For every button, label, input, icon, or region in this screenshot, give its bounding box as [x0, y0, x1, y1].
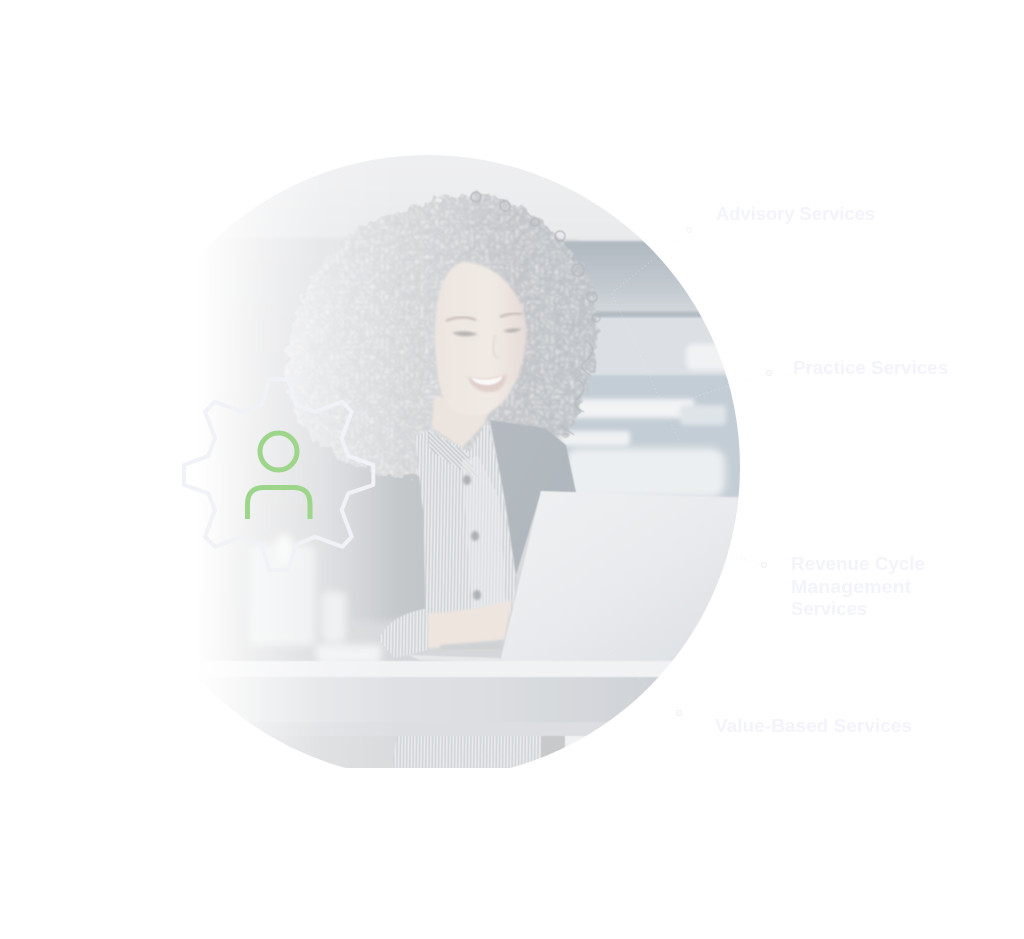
person head [260, 433, 297, 470]
face [435, 262, 526, 416]
connector: advisory [612, 228, 692, 443]
icon: gear with person [184, 379, 373, 570]
label: Revenue Cycle Management Services [791, 554, 925, 619]
gear outline [184, 379, 373, 570]
label: Value-Based Services: Value-Based Services [715, 716, 912, 736]
office background [225, 155, 740, 662]
connector: value-based [605, 650, 682, 716]
connector: revenue cycle [730, 555, 766, 568]
left jacket [346, 464, 425, 620]
label: Revenue Cycle Management Services: Management [791, 577, 911, 597]
label: Revenue Cycle Management Services: Services [791, 599, 867, 619]
label: Advisory Services: Advisory Services [716, 204, 875, 224]
neck [432, 395, 490, 448]
right jacket [490, 420, 576, 575]
striped shirt [415, 420, 516, 612]
desk [238, 660, 672, 768]
photo content [225, 155, 740, 768]
left fade to white [100, 150, 400, 790]
hand and cuff [379, 600, 512, 658]
photo disc: woman working at a laptop [225, 155, 740, 768]
hair curls at the edge [471, 192, 600, 435]
laptop [410, 490, 660, 661]
hair [287, 194, 598, 478]
person shoulders [248, 488, 310, 519]
label: Practice Services: Practice Services [793, 358, 948, 378]
desk objects: blurred pen holder and cup [250, 534, 382, 664]
connector: practice [685, 370, 772, 400]
infographic [182, 155, 947, 768]
label: Revenue Cycle Management Services: Revenue Cycle [791, 554, 925, 574]
